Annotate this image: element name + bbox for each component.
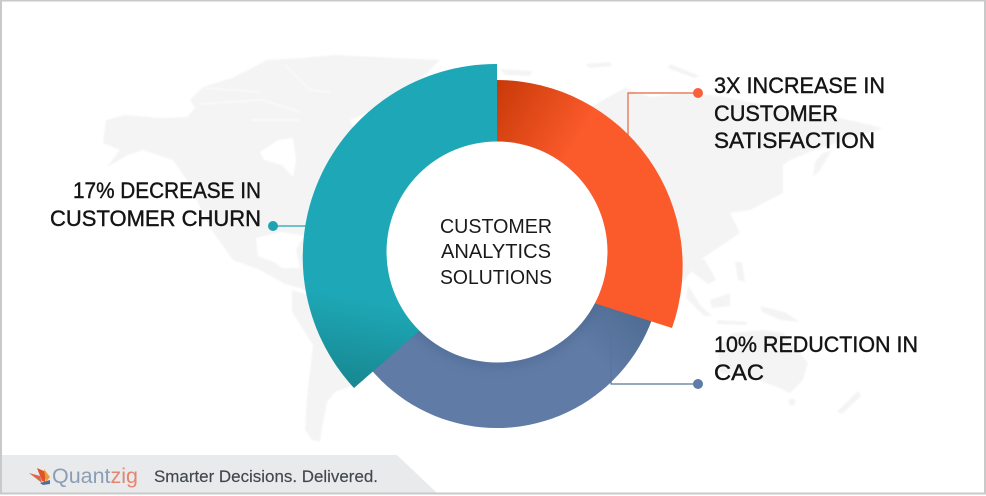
callout: customer satisfaction: CUSTOMER bbox=[714, 101, 838, 126]
dot: teal bbox=[268, 221, 278, 231]
tagline: Smarter Decisions. Delivered. bbox=[154, 468, 378, 486]
segment: blue bbox=[332, 98, 662, 428]
callout: CAC reduction: 10% REDUCTION IN bbox=[714, 332, 918, 357]
map: arctic channels bbox=[200, 65, 330, 120]
logo icon bbox=[29, 468, 50, 485]
center label bbox=[440, 215, 552, 289]
segment: orange bbox=[497, 80, 683, 328]
dot: blue bbox=[693, 379, 703, 389]
footer band bbox=[2, 455, 437, 493]
callout: customer satisfaction: 3X INCREASE IN bbox=[714, 73, 885, 98]
map: north america bbox=[103, 55, 440, 300]
connector: blue bbox=[611, 322, 695, 384]
center label: CUSTOMER bbox=[440, 215, 552, 238]
map: java and new guinea bbox=[717, 306, 800, 325]
map: new zealand bbox=[837, 391, 861, 414]
donut chart bbox=[303, 64, 695, 428]
callout: customer churn bbox=[50, 178, 261, 231]
map: gulf of mexico bbox=[256, 232, 304, 268]
map: eurasia bbox=[585, 88, 883, 300]
callout: customer satisfaction: SATISFACTION bbox=[714, 128, 875, 153]
logo wordmark: Quantzig bbox=[52, 465, 138, 488]
callout: CAC reduction: CAC bbox=[714, 360, 764, 385]
connector: orange bbox=[628, 93, 695, 135]
center circle bbox=[386, 142, 608, 362]
map: kamchatka bbox=[813, 150, 832, 177]
callout: customer satisfaction bbox=[714, 73, 885, 153]
logo bbox=[29, 465, 138, 488]
callout: customer churn: 17% DECREASE IN bbox=[73, 178, 261, 203]
map: southeast asia bbox=[686, 255, 745, 316]
segment: teal bbox=[303, 64, 497, 388]
map: northern islands bbox=[500, 62, 700, 78]
map: south america bbox=[292, 290, 355, 442]
map: tasmania bbox=[788, 398, 796, 406]
inner shadow on blue bbox=[383, 140, 611, 368]
callout: CAC reduction bbox=[714, 332, 918, 385]
connector: teal bbox=[273, 225, 310, 227]
center label: SOLUTIONS bbox=[440, 266, 552, 289]
world map background bbox=[103, 55, 883, 442]
dot: orange bbox=[693, 88, 703, 98]
callout: customer churn: CUSTOMER CHURN bbox=[50, 206, 261, 231]
map: australia bbox=[718, 330, 808, 393]
center label: ANALYTICS bbox=[441, 240, 551, 263]
map: hudson bay bbox=[260, 138, 296, 177]
